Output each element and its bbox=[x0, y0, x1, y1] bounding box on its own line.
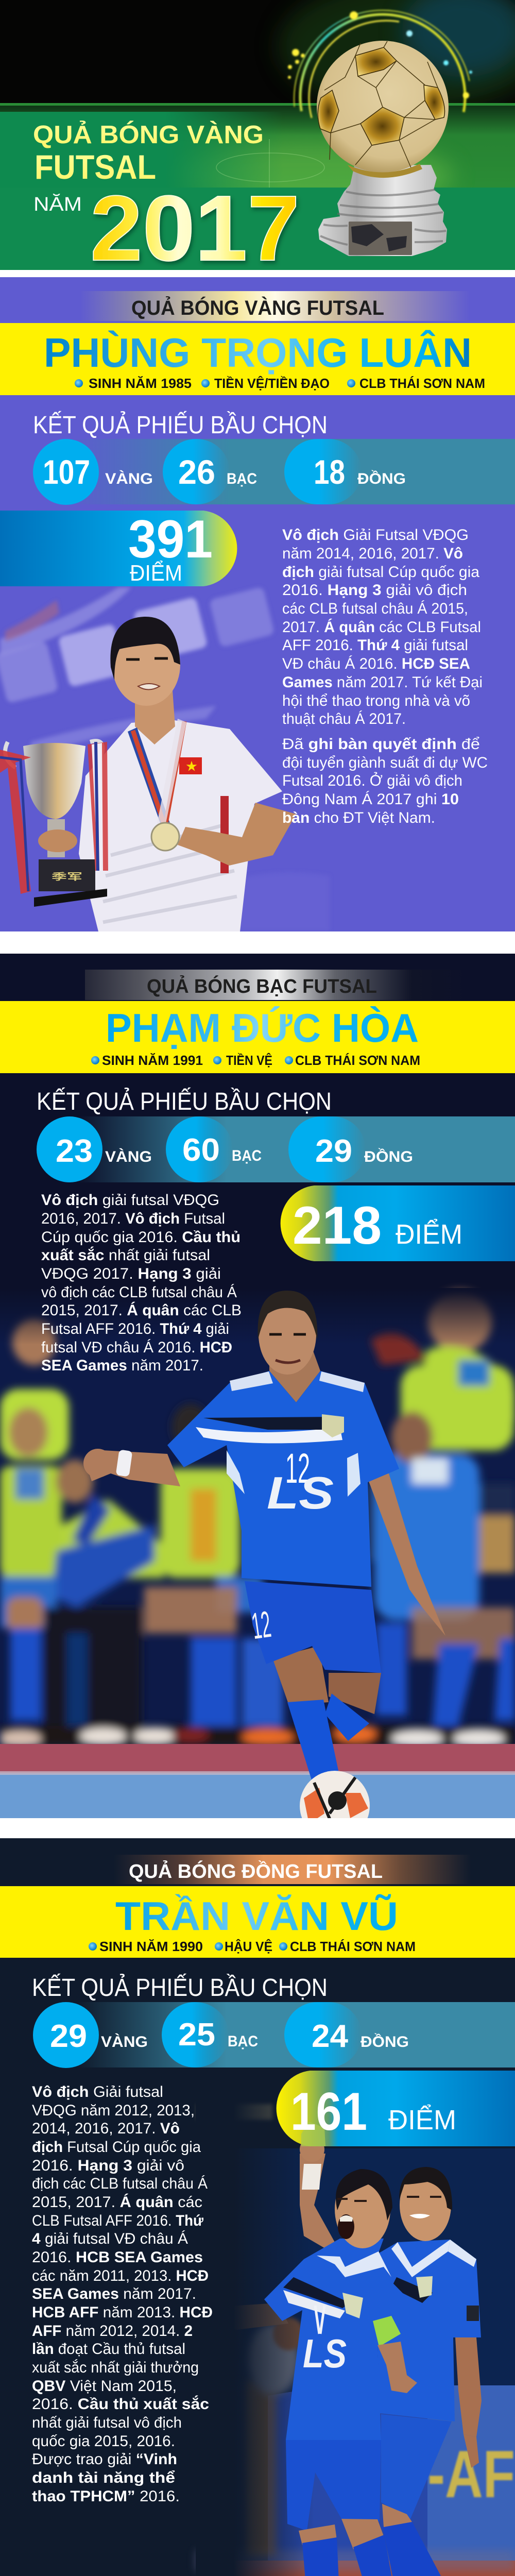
vote strip: VÀNG bbox=[105, 470, 153, 487]
achievements text: VĐ châu Á 2016. HCĐ SEA bbox=[282, 655, 470, 672]
sparkle lights bbox=[288, 11, 472, 98]
achievements text: hội thể thao trong nhà và võ bbox=[282, 692, 470, 709]
front player bbox=[264, 2169, 417, 2576]
vote strip: ĐỒNG bbox=[360, 2033, 409, 2050]
achievements text: địch Futsal Cúp quốc gia bbox=[32, 2139, 201, 2156]
vote strip: 26 bbox=[178, 453, 215, 491]
player facts bbox=[75, 376, 485, 391]
vote strip: 18 bbox=[314, 453, 345, 491]
vote strip: 24 bbox=[312, 2019, 349, 2054]
total score: 161 bbox=[277, 2071, 515, 2146]
vote strip: 29 bbox=[315, 1133, 352, 1169]
achievements text: 2016. HCB SEA Games bbox=[32, 2249, 203, 2266]
vote strip bbox=[33, 439, 515, 505]
vote strip: BẠC bbox=[227, 470, 257, 487]
main player: LS bbox=[267, 1467, 334, 1518]
achievements text: đội tuyển giành suất đi dự WC bbox=[282, 754, 488, 771]
front player: LS bbox=[303, 2331, 347, 2376]
achievements text: 2016. Cầu thủ xuất sắc bbox=[32, 2395, 209, 2413]
vote strip bbox=[33, 2002, 515, 2068]
achievements text: Đông Nam Á 2017 ghi 10 bbox=[282, 791, 459, 808]
total score: 391: ĐIỂM bbox=[130, 560, 182, 586]
heading: vote results: KẾT QUẢ PHIẾU BẦU CHỌN bbox=[37, 1087, 332, 1115]
achievements text: HCB AFF năm 2013. HCĐ bbox=[32, 2304, 213, 2321]
total score: 161: ĐIỂM bbox=[388, 2105, 456, 2136]
achievements text: 2016. Hạng 3 giải vô địch bbox=[282, 582, 467, 599]
icon: golden ball trophy bbox=[317, 41, 449, 256]
blurred bench players bbox=[0, 1291, 515, 1747]
section label bar bbox=[85, 970, 470, 1000]
name band: Phùng Trọng Luân: PHÙNG TRỌNG LUÂN bbox=[44, 330, 472, 376]
trophy bbox=[0, 741, 108, 907]
achievements text: VĐQG năm 2012, 2013, bbox=[32, 2102, 195, 2119]
title text: NĂM bbox=[33, 193, 82, 215]
vote strip: 29 bbox=[50, 2019, 87, 2054]
section label bar bbox=[80, 291, 470, 321]
achievements text: quốc gia 2015, 2016. bbox=[32, 2433, 175, 2450]
total score: 391 bbox=[0, 510, 237, 586]
title text bbox=[33, 121, 300, 280]
title text: FUTSAL bbox=[35, 148, 156, 186]
total score: 391: 391 bbox=[128, 510, 213, 569]
achievements text: danh tài năng thể bbox=[32, 2469, 175, 2486]
title text: QUẢ BÓNG VÀNG bbox=[33, 121, 264, 149]
background board and floor bbox=[196, 2317, 515, 2576]
achievements text: 2016. Hạng 3 giải vô bbox=[32, 2157, 184, 2174]
achievements text: các năm 2011, 2013. HCĐ bbox=[32, 2267, 209, 2284]
main player: 12 bbox=[285, 1445, 310, 1492]
achievements text: 2015, 2017. Á quân các CLB bbox=[41, 1301, 242, 1319]
section label bar: QUẢ BÓNG VÀNG FUTSAL bbox=[131, 296, 384, 319]
achievements text: AFF năm 2012, 2014. 2 bbox=[32, 2323, 193, 2340]
achievements text: Đã ghi bàn quyết định để bbox=[282, 736, 480, 753]
achievements text: nhất giải futsal vô địch bbox=[32, 2414, 182, 2431]
achievements text: SEA Games năm 2017. bbox=[41, 1357, 203, 1374]
achievements text bbox=[282, 527, 488, 826]
name band: Phạm Đức Hòa: PHẠM ĐỨC HÒA bbox=[106, 1005, 419, 1050]
vote strip: 60 bbox=[182, 1132, 220, 1168]
photo: Phùng Trọng Luân with trophy: ★ bbox=[186, 760, 197, 773]
player facts: CLB THÁI SƠN NAM bbox=[295, 1053, 420, 1068]
achievements text: Vô địch giải futsal VĐQG bbox=[41, 1192, 219, 1209]
futsal ball bbox=[300, 1771, 370, 1841]
achievements text bbox=[32, 2083, 213, 2505]
total score: 218: 218 bbox=[293, 1196, 382, 1256]
player facts: CLB THÁI SƠN NAM bbox=[359, 376, 485, 391]
flag bbox=[179, 757, 202, 774]
achievements text: CLB Futsal AFF 2016. Thứ bbox=[32, 2212, 203, 2229]
vote strip: 107 bbox=[43, 453, 90, 491]
achievements text: Vô địch Giải Futsal VĐQG bbox=[282, 527, 469, 544]
vote strip: 23 bbox=[56, 1133, 93, 1169]
achievements text: địch giải futsal Cúp quốc gia bbox=[282, 564, 479, 581]
photo: Phạm Đức Hòa on court bbox=[0, 1288, 515, 1841]
trophy: 季军 bbox=[52, 872, 82, 882]
main player bbox=[83, 1291, 445, 1841]
achievements text: bàn cho ĐT Việt Nam. bbox=[282, 809, 435, 826]
ball pentagons bbox=[318, 47, 445, 145]
lower green strip bbox=[0, 188, 515, 270]
raised arm with wristband bbox=[300, 2137, 340, 2254]
forearm and hand bbox=[178, 803, 296, 866]
court floor bbox=[0, 1744, 515, 1818]
name band: Phùng Trọng Luân bbox=[0, 323, 515, 395]
heading: vote results: KẾT QUẢ PHIẾU BẦU CHỌN bbox=[33, 411, 328, 439]
achievements text: 2017. Á quân các CLB Futsal bbox=[282, 618, 481, 636]
total score: 161: 161 bbox=[290, 2082, 367, 2142]
achievements text: 2016, 2017. Vô địch Futsal bbox=[41, 1210, 225, 1227]
player facts bbox=[89, 1939, 416, 1954]
achievements text: thao TPHCM” 2016. bbox=[32, 2488, 180, 2505]
vote strip: VÀNG bbox=[105, 1148, 152, 1165]
achievements text: 2015, 2017. Á quân các bbox=[32, 2193, 202, 2211]
section label bar bbox=[113, 1855, 471, 1884]
achievements text: Games năm 2017. Tứ kết Đại bbox=[282, 674, 483, 691]
section label bar: QUẢ BÓNG ĐỒNG FUTSAL bbox=[129, 1860, 383, 1883]
achievements text: Được trao giải “Vinh bbox=[32, 2451, 177, 2468]
vote strip: BẠC bbox=[228, 2033, 258, 2050]
photo: Phùng Trọng Luân with trophy bbox=[0, 586, 296, 931]
achievements text: QBV Việt Nam 2015, bbox=[32, 2378, 177, 2395]
achievements text: futsal VĐ châu Á 2016. HCĐ bbox=[41, 1339, 232, 1356]
glowing rings bbox=[293, 8, 471, 120]
player facts: TIỀN VỆ bbox=[226, 1053, 272, 1068]
achievements text: SEA Games năm 2017. bbox=[32, 2285, 196, 2302]
achievements text: thuật châu Á 2017. bbox=[282, 710, 406, 727]
heading: vote results: KẾT QUẢ PHIẾU BẦU CHỌN bbox=[32, 1973, 328, 2002]
achievements text: xuất sắc nhất giải thưởng bbox=[32, 2359, 199, 2376]
achievements text: xuất sắc nhất giải futsal bbox=[41, 1246, 210, 1264]
achievements text: năm 2014, 2016, 2017. Vô bbox=[282, 545, 463, 562]
achievements text: Futsal AFF 2016. Thứ 4 giải bbox=[41, 1320, 229, 1337]
medal and ribbons bbox=[128, 727, 170, 824]
player facts: TIỀN VỆ/TIỀN ĐẠO bbox=[214, 376, 330, 391]
player facts: CLB THÁI SƠN NAM bbox=[290, 1939, 416, 1954]
total score: 218: ĐIỂM bbox=[396, 1219, 462, 1250]
name band: Trần Văn Vũ: TRẦN VĂN VŨ bbox=[115, 1893, 398, 1939]
shirt bbox=[79, 720, 282, 931]
player facts bbox=[91, 1053, 420, 1068]
achievements text: VĐQG 2017. Hạng 3 giải bbox=[41, 1265, 221, 1282]
vote strip: 25 bbox=[178, 2017, 215, 2053]
achievements text: 2014, 2016, 2017. Vô bbox=[32, 2120, 180, 2137]
panel: bronze ball winner bbox=[0, 1838, 515, 2576]
vote strip: ĐỒNG bbox=[364, 1148, 413, 1165]
stadium field bbox=[0, 103, 515, 188]
pedestal bbox=[318, 165, 447, 256]
vote strip bbox=[37, 1116, 515, 1182]
achievements text: vô địch các CLB futsal châu Á bbox=[41, 1284, 237, 1301]
head and neck bbox=[135, 690, 175, 744]
achievements text: lần đoạt Cầu thủ futsal bbox=[32, 2341, 185, 2358]
section label bar: QUẢ BÓNG BẠC FUTSAL bbox=[147, 975, 377, 997]
achievements text: địch các CLB futsal châu Á bbox=[32, 2175, 208, 2192]
achievements text: AFF 2016. Thứ 4 giải futsal bbox=[282, 637, 468, 654]
vote strip: VÀNG bbox=[101, 2033, 148, 2050]
panel: gold ball winner bbox=[0, 277, 515, 931]
vote strip: BẠC bbox=[232, 1147, 262, 1164]
title text: 2017 bbox=[90, 177, 300, 280]
name band: Phạm Đức Hòa bbox=[0, 1001, 515, 1073]
blurred arm reaching left bbox=[197, 2104, 272, 2120]
player facts: SINH NĂM 1990 bbox=[99, 1939, 203, 1954]
achievements text: Cúp quốc gia 2016. Cầu thủ bbox=[41, 1229, 241, 1246]
total score: 218 bbox=[281, 1185, 515, 1261]
background boards bbox=[0, 586, 274, 745]
back player bbox=[355, 2167, 482, 2576]
photo: Trần Văn Vũ celebrating bbox=[196, 2068, 515, 2576]
player facts: HẬU VỆ bbox=[225, 1939, 272, 1954]
panel: header banner bbox=[0, 0, 515, 280]
player facts: SINH NĂM 1985 bbox=[89, 376, 192, 391]
achievements text: Vô địch Giải futsal bbox=[32, 2083, 163, 2100]
name band: Trần Văn Vũ bbox=[0, 1886, 515, 1958]
achievements text: Futsal 2016. Ở giải vô địch bbox=[282, 772, 462, 789]
player facts: SINH NĂM 1991 bbox=[102, 1053, 203, 1068]
panel: silver ball winner bbox=[0, 954, 515, 1841]
achievements text: các CLB futsal châu Á 2015, bbox=[282, 600, 468, 617]
vote strip: ĐỒNG bbox=[357, 470, 406, 487]
achievements text: 4 giải futsal VĐ châu Á bbox=[32, 2230, 188, 2247]
main player: 12 bbox=[249, 1604, 273, 1647]
achievements text bbox=[41, 1192, 242, 1374]
